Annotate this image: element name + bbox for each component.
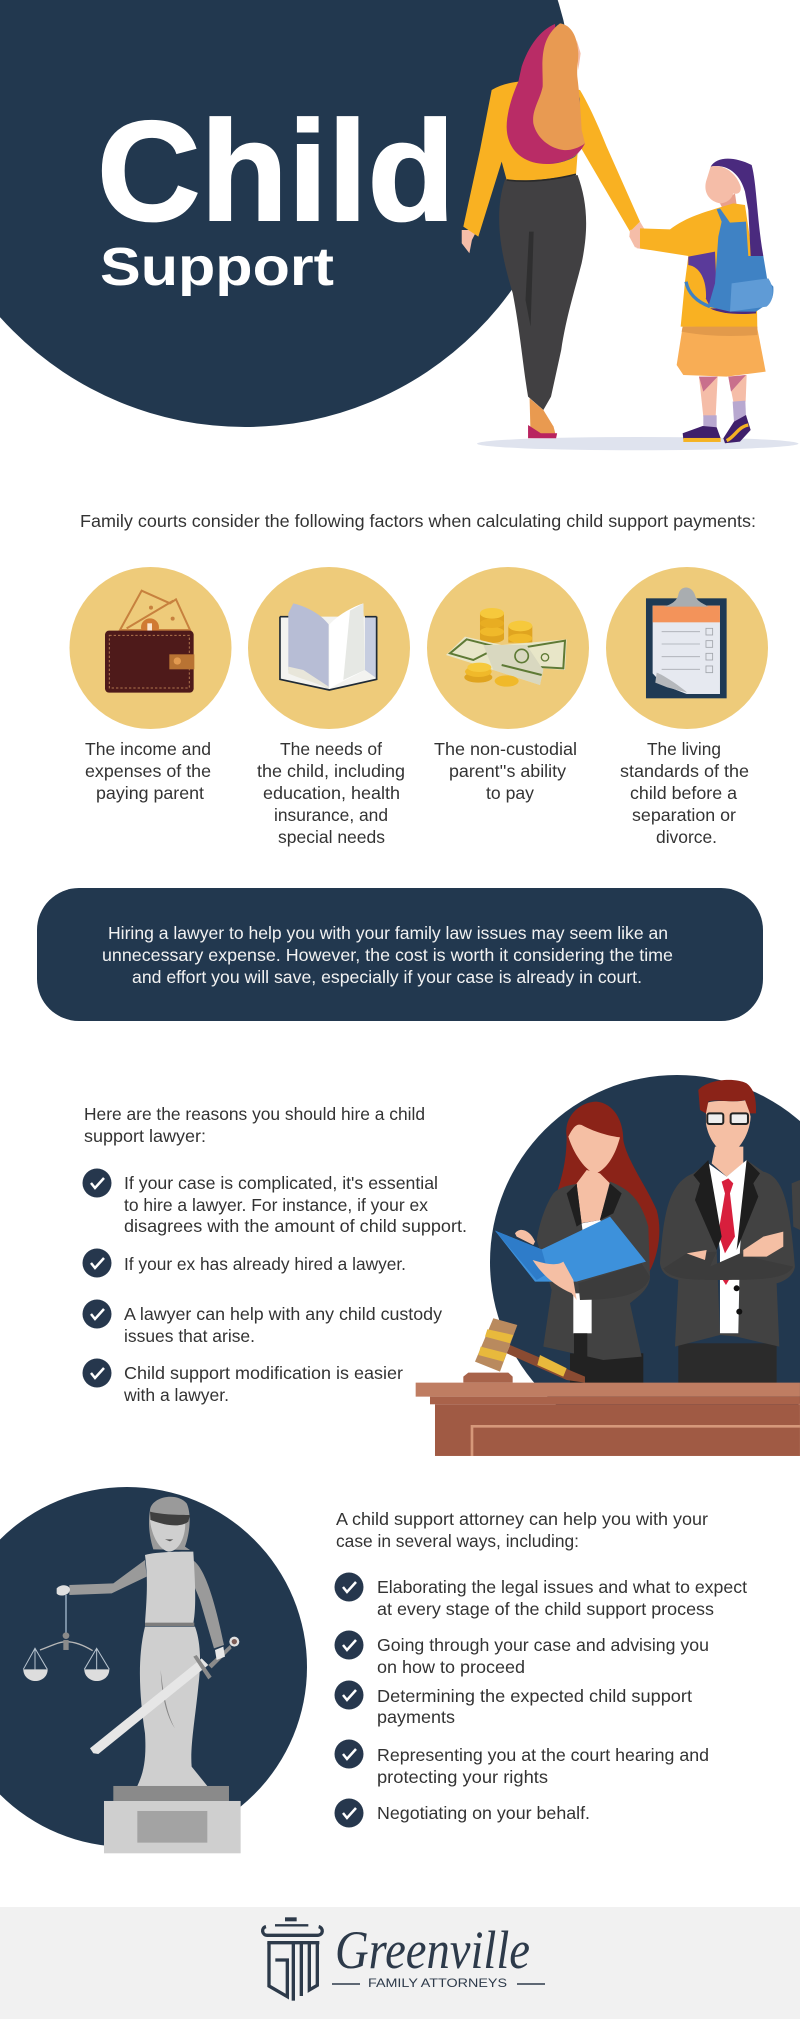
- help item 4: Representing you at the court hearing and: [377, 1745, 709, 1765]
- help item 2: [334, 1630, 709, 1677]
- callout banner: unnecessary expense. However, the cost is worth it considering the time: [102, 945, 673, 965]
- logo: Greenville Family Attorneys: [263, 1919, 545, 2001]
- label: living standards: child before a: [630, 783, 737, 803]
- help item 1: at every stage of the child support process: [377, 1599, 714, 1619]
- reason 3: A lawyer can help with any child custody: [124, 1304, 442, 1324]
- illustration: lawyers at desk: [416, 1075, 800, 1456]
- reason 2: [82, 1248, 406, 1278]
- reason 3: [82, 1300, 442, 1346]
- label: ability: parent''s ability: [449, 761, 566, 781]
- footer band: [0, 1907, 800, 2019]
- label: needs: the child, including: [257, 761, 405, 781]
- illustration: lady justice statue: [0, 1487, 307, 1853]
- label: living standards: [620, 739, 749, 847]
- help item 4: [334, 1740, 709, 1787]
- callout banner: and effort you will save, especially if your case is already in court.: [132, 967, 642, 987]
- label: living standards: separation or: [632, 805, 736, 825]
- reason 3: issues that arise.: [124, 1326, 255, 1346]
- icon: open book: [248, 567, 410, 729]
- label: needs: insurance, and: [274, 805, 388, 825]
- label: needs: special needs: [278, 827, 385, 847]
- help item 1: [334, 1572, 747, 1619]
- heading: reasons to hire: Here are the reasons you should hire a child: [84, 1104, 425, 1124]
- logo: Greenville Family Attorneys: FAMILY ATTORNEYS: [368, 1976, 507, 1990]
- reason 1: disagrees with the amount of child support.: [124, 1216, 467, 1236]
- reason 4: [82, 1358, 403, 1405]
- label: income: paying parent: [96, 783, 204, 803]
- heading: reasons to hire: [84, 1104, 425, 1146]
- logo: Greenville Family Attorneys: Greenville: [335, 1920, 530, 1980]
- label: living standards: The living: [647, 739, 721, 759]
- label: ability: [434, 739, 577, 803]
- help item 3: Determining the expected child support: [377, 1686, 692, 1706]
- help item 3: payments: [377, 1707, 455, 1727]
- heading: how an attorney helps: case in several ways, including:: [336, 1531, 579, 1551]
- reason 1: If your case is complicated, it's essential: [124, 1173, 438, 1193]
- label: income: expenses of the: [85, 761, 211, 781]
- reason 2: If your ex has already hired a lawyer.: [124, 1254, 406, 1274]
- label: needs: education, health: [263, 783, 400, 803]
- label: needs: The needs of: [280, 739, 382, 759]
- panel: income factor: [70, 567, 232, 803]
- hero background circle: [0, 0, 573, 427]
- help item 4: protecting your rights: [377, 1767, 548, 1787]
- panel: ability to pay factor: [427, 567, 589, 803]
- help item 3: [334, 1680, 692, 1727]
- help item 1: Elaborating the legal issues and what to expect: [377, 1577, 747, 1597]
- label: living standards: standards of the: [620, 761, 749, 781]
- label: living standards: divorce.: [656, 827, 717, 847]
- icon: cash and coins: [427, 567, 589, 729]
- heading: reasons to hire: support lawyer:: [84, 1126, 206, 1146]
- title: Child: [97, 92, 455, 251]
- heading: how an attorney helps: A child support attorney can help you with your: [336, 1509, 708, 1529]
- label: ability: to pay: [486, 783, 534, 803]
- help item 2: on how to proceed: [377, 1657, 525, 1677]
- label: needs: [257, 739, 405, 847]
- label: income: The income and: [85, 739, 211, 759]
- label: ability: The non-custodial: [434, 739, 577, 759]
- callout banner: [37, 888, 763, 1021]
- callout banner: Hiring a lawyer to help you with your family law issues may seem like an: [108, 923, 668, 943]
- reason 4: Child support modification is easier: [124, 1363, 403, 1383]
- help item 5: Negotiating on your behalf.: [377, 1803, 590, 1823]
- reason 1: [82, 1168, 467, 1236]
- title: Support: [100, 237, 334, 297]
- reason 4: with a lawyer.: [123, 1385, 229, 1405]
- icon: clipboard: [606, 567, 768, 729]
- help item 5: [334, 1798, 590, 1828]
- help item 2: Going through your case and advising you: [377, 1635, 709, 1655]
- panel: child needs factor: [248, 567, 410, 847]
- heading: how an attorney helps: [336, 1509, 708, 1551]
- label: income: [85, 739, 211, 803]
- reason 1: to hire a lawyer. For instance, if your ex: [124, 1195, 428, 1215]
- panel: living standards factor: [606, 567, 768, 847]
- illustration: mother and daughter holding hands: [462, 23, 798, 450]
- icon: wallet: [70, 567, 232, 729]
- intro text: Family courts consider the following factors when calculating child support payments:: [80, 511, 756, 531]
